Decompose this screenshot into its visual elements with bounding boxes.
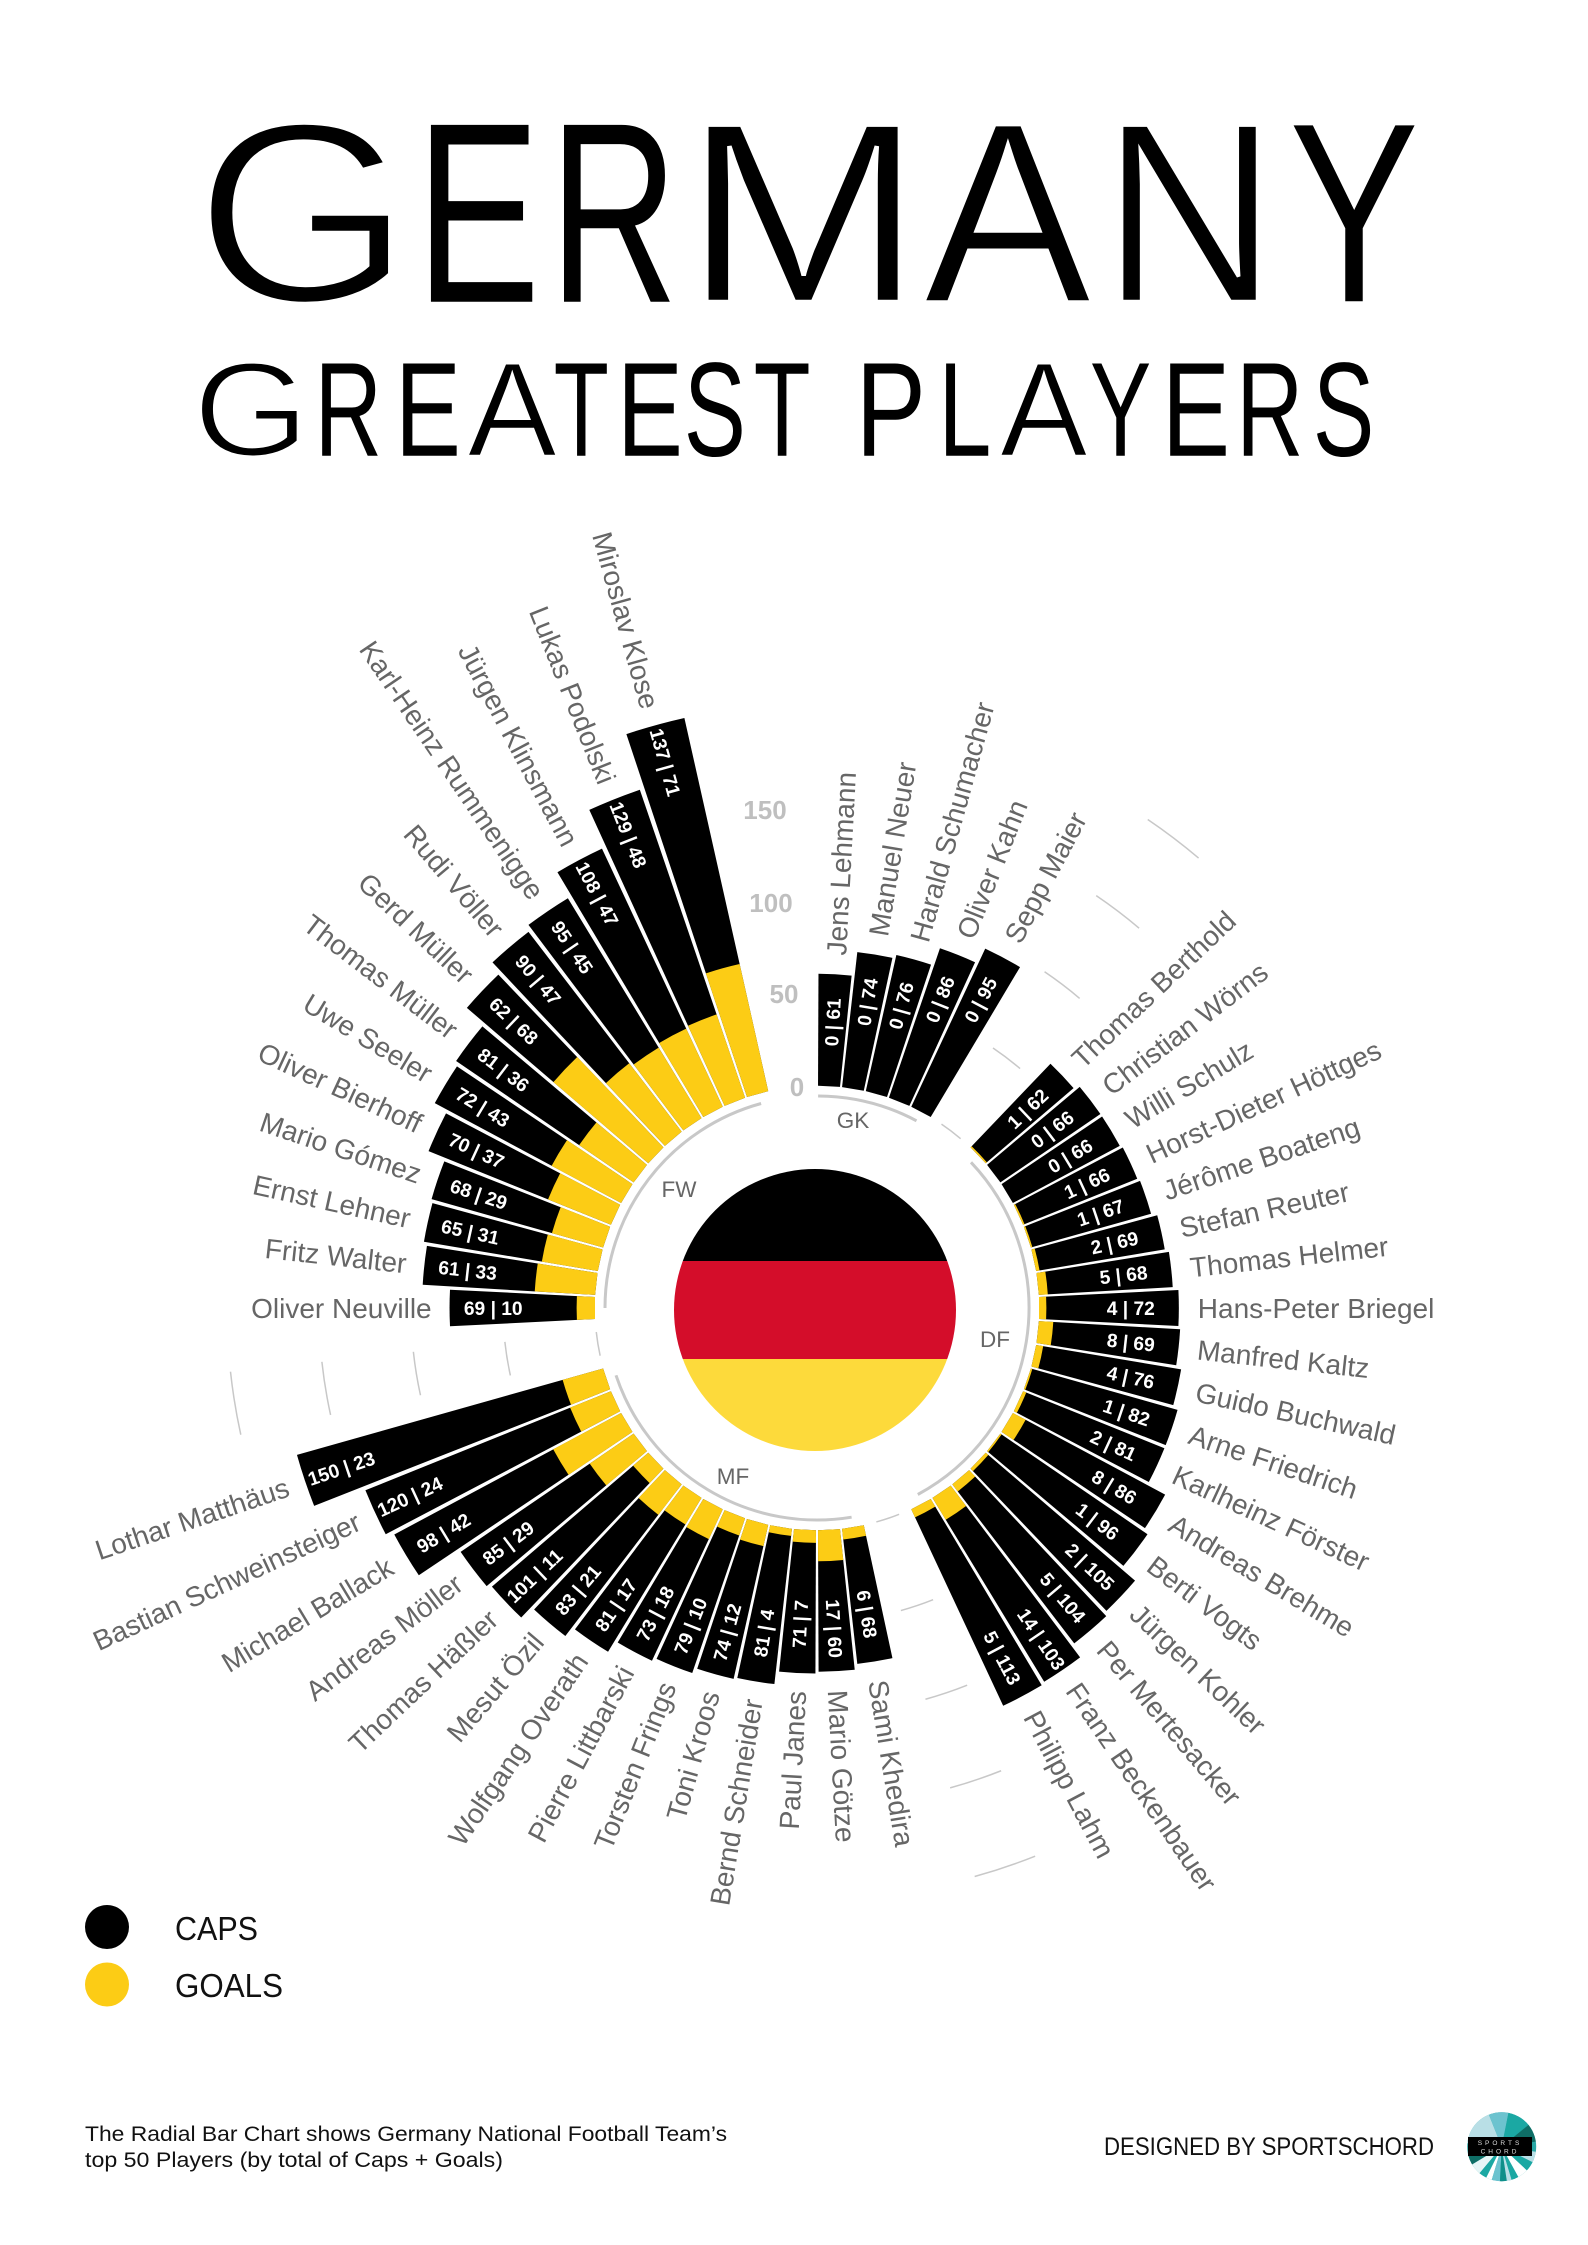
player: Harald Schumacher: 0 | 76 xyxy=(886,980,919,1032)
player: Lukas Podolski xyxy=(513,597,760,1112)
player: Horst-Dieter Höttges xyxy=(1011,1032,1386,1230)
player: Thomas Berthold xyxy=(967,904,1242,1168)
player: Bernd Schneider: Bernd Schneider xyxy=(704,1697,769,1908)
credit: DESIGNED BY SPORTSCHORD xyxy=(1104,2133,1434,2161)
player: Paul Janes xyxy=(771,1529,823,1830)
title: GERMANY: N xyxy=(1102,70,1278,357)
player: Hans-Peter Briegel: 4 | 72 xyxy=(1107,1299,1155,1320)
position labels: DF xyxy=(980,1327,1010,1352)
player: Fritz Walter xyxy=(263,1228,598,1303)
player: Toni Kroos: 74 | 12 xyxy=(710,1602,746,1664)
player: Manuel Neuer: 0 | 74 xyxy=(854,976,883,1028)
subtitle: GREATEST PLAYERS: T xyxy=(554,336,609,485)
player: Lukas Podolski: 129 | 48 xyxy=(604,799,650,872)
player: Guido Buchwald xyxy=(1030,1338,1399,1453)
player: Christian Wörns xyxy=(983,955,1274,1187)
player: Christian Wörns: 0 | 66 xyxy=(1028,1108,1079,1153)
player: Paul Janes: Paul Janes xyxy=(774,1690,812,1830)
player: Arne Friedrich xyxy=(1021,1361,1363,1507)
player: Toni Kroos: Toni Kroos xyxy=(661,1688,726,1823)
player: Jürgen Klinsmann: 108 | 47 xyxy=(571,859,622,930)
footnote xyxy=(85,2123,727,2172)
player: Per Mertesacker xyxy=(945,1464,1252,1815)
player: Jérôme Boateng: 1 | 67 xyxy=(1075,1196,1127,1232)
player: Sami Khedira xyxy=(835,1524,923,1849)
player: Thomas Häßler xyxy=(338,1445,670,1763)
player: Jürgen Kohler: Jürgen Kohler xyxy=(1124,1598,1272,1741)
group arc: MF xyxy=(616,1375,852,1520)
player: Stefan Reuter: Stefan Reuter xyxy=(1177,1176,1352,1244)
player: Jérôme Boateng xyxy=(1022,1109,1364,1254)
player: Thomas Helmer xyxy=(1036,1228,1390,1302)
player: Jens Lehmann xyxy=(812,771,863,1087)
player: Thomas Häßler: 101 | 11 xyxy=(503,1545,568,1608)
player: Sepp Maier xyxy=(904,805,1096,1121)
player: Oliver Bierhoff: Oliver Bierhoff xyxy=(253,1037,427,1139)
subtitle: GREATEST PLAYERS: R xyxy=(1236,336,1303,485)
player: Philipp Lahm: Philipp Lahm xyxy=(1017,1706,1121,1863)
subtitle: GREATEST PLAYERS: A xyxy=(1000,336,1088,485)
central flag of Germany xyxy=(670,1165,960,1455)
player: Gerd Müller: 62 | 68 xyxy=(484,994,542,1050)
player: Mario Gómez: Mario Gómez xyxy=(256,1107,425,1190)
player: Jürgen Kohler xyxy=(964,1446,1276,1744)
subtitle: GREATEST PLAYERS: A xyxy=(467,336,558,485)
player: Mario Götze: 17 | 60 xyxy=(821,1599,845,1659)
player: Bernd Schneider xyxy=(701,1524,800,1908)
player: Rudi Völler: 90 | 47 xyxy=(510,952,564,1010)
player: Horst-Dieter Höttges: Horst-Dieter Höttges xyxy=(1141,1034,1386,1170)
player: Lukas Podolski: Lukas Podolski xyxy=(523,602,622,788)
legend: goals label: GOALS xyxy=(175,1967,283,2004)
subtitle: GREATEST PLAYERS: E xyxy=(617,336,683,485)
position labels: MF xyxy=(717,1464,749,1489)
grid arcs: DF-MF gap xyxy=(857,1508,1035,1877)
player: Thomas Müller xyxy=(294,903,653,1191)
player: Thomas Müller: Thomas Müller xyxy=(297,908,464,1045)
player: Thomas Helmer: 5 | 68 xyxy=(1099,1263,1149,1289)
player: Sepp Maier: 0 | 95 xyxy=(961,974,1002,1027)
player: Uwe Seeler: 72 | 43 xyxy=(452,1084,513,1132)
player: Manuel Neuer: Manuel Neuer xyxy=(863,760,922,938)
title: GERMANY: M xyxy=(683,70,924,357)
player: Per Mertesacker: Per Mertesacker xyxy=(1091,1635,1247,1812)
player: Arne Friedrich: 1 | 82 xyxy=(1100,1396,1152,1431)
subtitle: GREATEST PLAYERS: E xyxy=(395,336,461,485)
player: Willi Schulz xyxy=(998,1033,1259,1208)
player: Miroslav Klose: 137 | 71 xyxy=(645,726,683,799)
player: Lothar Matthäus: 150 | 23 xyxy=(306,1449,378,1491)
player: Uwe Seeler: Uwe Seeler xyxy=(298,988,438,1089)
grid arcs: MF-FW gap xyxy=(230,1312,603,1435)
player: Per Mertesacker: 5 | 104 xyxy=(1035,1569,1089,1628)
player: Oliver Neuville xyxy=(251,1290,595,1326)
player: Oliver Kahn: 0 | 86 xyxy=(923,974,960,1026)
subtitle: GREATEST PLAYERS: Y xyxy=(1090,336,1151,485)
player: Torsten Frings: Torsten Frings xyxy=(588,1678,682,1854)
player: Andreas Möller xyxy=(296,1425,653,1711)
player: Rudi Völler: Rudi Völler xyxy=(398,819,510,943)
player: Bastian Schweinsteiger: Bastian Schweinsteiger xyxy=(88,1506,365,1657)
group arc: GK xyxy=(818,1096,916,1121)
player: Guido Buchwald: 4 | 76 xyxy=(1105,1363,1156,1394)
player: Oliver Kahn: Oliver Kahn xyxy=(951,796,1034,943)
player: Manfred Kaltz xyxy=(1036,1314,1371,1386)
player: Philipp Lahm xyxy=(902,1494,1127,1866)
player: Michael Ballack: Michael Ballack xyxy=(216,1551,400,1678)
player: Fritz Walter: Fritz Walter xyxy=(263,1233,408,1279)
subtitle: GREATEST PLAYERS: E xyxy=(1162,336,1230,485)
player: Bastian Schweinsteiger: 120 | 24 xyxy=(375,1474,447,1522)
player: Arne Friedrich: Arne Friedrich xyxy=(1185,1419,1362,1505)
player: Oliver Neuville: 69 | 10 xyxy=(464,1299,523,1320)
player: Mario Götze: Mario Götze xyxy=(822,1689,861,1843)
player: Jürgen Klinsmann: Jürgen Klinsmann xyxy=(452,639,584,851)
player: Torsten Frings xyxy=(584,1507,753,1855)
player: Torsten Frings: 79 | 10 xyxy=(671,1595,712,1658)
player: Thomas Berthold: Thomas Berthold xyxy=(1066,905,1242,1074)
player: Mario Gómez xyxy=(255,1102,613,1256)
player: Willi Schulz: Willi Schulz xyxy=(1120,1035,1258,1135)
player: Stefan Reuter: 2 | 69 xyxy=(1089,1229,1141,1259)
player: Hans-Peter Briegel xyxy=(1039,1290,1434,1326)
player: Sepp Maier: Sepp Maier xyxy=(999,807,1093,948)
group arc: DF xyxy=(918,1162,1029,1494)
player: Franz Beckenbauer: 14 | 103 xyxy=(1012,1605,1068,1675)
subtitle: GREATEST PLAYERS: S xyxy=(684,336,746,485)
player: Stefan Reuter xyxy=(1030,1174,1352,1277)
subtitle: GREATEST PLAYERS: G xyxy=(193,336,310,485)
player: Guido Buchwald: Guido Buchwald xyxy=(1193,1377,1398,1451)
player: Pierre Littbarski: 73 | 18 xyxy=(633,1583,680,1645)
player: Harald Schumacher xyxy=(859,698,1002,1099)
player: Manuel Neuer xyxy=(835,759,924,1092)
player: Andreas Möller: Andreas Möller xyxy=(300,1568,469,1707)
player: Sami Khedira: Sami Khedira xyxy=(862,1678,920,1849)
player: Ernst Lehner xyxy=(249,1165,604,1280)
title: GERMANY: A xyxy=(924,70,1093,357)
player: Berti Vogts: Berti Vogts xyxy=(1141,1550,1268,1657)
axis scale labels: 150 xyxy=(743,795,787,825)
player: Christian Wörns: Christian Wörns xyxy=(1096,956,1274,1101)
player: Gerd Müller: Gerd Müller xyxy=(352,867,479,990)
player: Karlheinz Förster: 2 | 81 xyxy=(1087,1427,1139,1466)
footnote: top 50 Players (by total of Caps + Goals) xyxy=(85,2149,503,2172)
axis scale labels: 0 xyxy=(790,1072,804,1102)
player: Fritz Walter: 61 | 33 xyxy=(437,1258,498,1285)
grid arcs: GK-DF gap xyxy=(926,819,1199,1151)
player: Michael Ballack: 98 | 42 xyxy=(414,1510,475,1558)
player: Berti Vogts: 1 | 96 xyxy=(1071,1500,1122,1545)
player: Wolfgang Overath: Wolfgang Overath xyxy=(442,1647,594,1851)
player: Sami Khedira: 6 | 68 xyxy=(851,1589,880,1640)
footnote: The Radial Bar Chart shows Germany National Football Team’s xyxy=(85,2123,727,2146)
player: Andreas Brehme: 8 | 86 xyxy=(1088,1467,1140,1510)
title: GERMANY: R xyxy=(549,70,678,357)
title: GERMANY: G xyxy=(195,70,412,357)
player: Harald Schumacher: Harald Schumacher xyxy=(904,699,1001,945)
player: Philipp Lahm: 5 | 113 xyxy=(978,1628,1024,1689)
player: Miroslav Klose: Miroslav Klose xyxy=(586,529,665,712)
player: Andreas Brehme xyxy=(997,1406,1362,1647)
legend xyxy=(85,1905,283,2006)
subtitle: GREATEST PLAYERS: R xyxy=(314,336,382,485)
player: Karl-Heinz Rummenigge xyxy=(347,630,712,1138)
player: Wolfgang Overath xyxy=(438,1481,709,1853)
player: Paul Janes: 71 | 7 xyxy=(790,1600,813,1649)
player: Jürgen Kohler: 2 | 105 xyxy=(1061,1540,1118,1596)
position labels xyxy=(662,1108,1010,1489)
subtitle: GREATEST PLAYERS: S xyxy=(1313,336,1374,485)
player: Ernst Lehner: 65 | 31 xyxy=(439,1217,501,1250)
player: Uwe Seeler xyxy=(295,982,638,1212)
player: Willi Schulz: 0 | 66 xyxy=(1045,1136,1097,1178)
position labels: FW xyxy=(662,1177,697,1202)
axis scale labels: 50 xyxy=(770,979,798,1009)
player: Bernd Schneider: 81 | 4 xyxy=(751,1608,779,1659)
legend: goals swatch xyxy=(85,1962,129,2006)
player: Mesut Özil xyxy=(437,1464,689,1751)
player: Mesut Özil: 83 | 21 xyxy=(552,1561,606,1620)
player: Ernst Lehner: Ernst Lehner xyxy=(250,1169,413,1234)
subtitle: GREATEST PLAYERS: T xyxy=(754,336,809,485)
player: Hans-Peter Briegel: Hans-Peter Briegel xyxy=(1198,1293,1434,1324)
player: Thomas Helmer: Thomas Helmer xyxy=(1188,1231,1390,1283)
player: Mario Gómez: 68 | 29 xyxy=(447,1176,510,1215)
icon: SportsChord logo: CHORD xyxy=(1481,2148,1519,2156)
player: Oliver Bierhoff: 70 | 37 xyxy=(445,1130,507,1174)
player: Karlheinz Förster xyxy=(1011,1384,1376,1580)
icon: SportsChord logo xyxy=(1467,2112,1536,2182)
player: Mario Götze xyxy=(811,1529,864,1843)
player: Michael Ballack xyxy=(212,1402,639,1685)
player: Oliver Kahn xyxy=(882,794,1036,1109)
player: Gerd Müller xyxy=(347,861,672,1172)
player: Oliver Bierhoff xyxy=(251,1031,624,1234)
title: GERMANY: Y xyxy=(1289,70,1420,357)
player: Jens Lehmann: 0 | 61 xyxy=(822,997,846,1047)
subtitle: GREATEST PLAYERS: L xyxy=(938,336,991,485)
player: Thomas Müller: 81 | 36 xyxy=(473,1045,532,1097)
player: Toni Kroos xyxy=(657,1517,776,1824)
player: Mesut Özil: Mesut Özil xyxy=(441,1627,550,1748)
group arc: FW xyxy=(605,1104,761,1308)
player: Karl-Heinz Rummenigge: 95 | 45 xyxy=(546,918,596,978)
player: Horst-Dieter Höttges: 1 | 66 xyxy=(1061,1165,1114,1204)
player: Franz Beckenbauer xyxy=(924,1480,1228,1900)
player: Rudi Völler xyxy=(392,813,691,1154)
player: Jens Lehmann: Jens Lehmann xyxy=(821,771,862,956)
player: Jürgen Klinsmann xyxy=(444,634,735,1124)
player: Lothar Matthäus xyxy=(88,1353,615,1576)
axis scale labels xyxy=(743,795,804,1102)
player: Berti Vogts xyxy=(982,1427,1271,1660)
player: Miroslav Klose xyxy=(573,525,787,1102)
player: Andreas Möller: 85 | 29 xyxy=(479,1518,539,1570)
player: Karl-Heinz Rummenigge: Karl-Heinz Rummenigge xyxy=(353,635,550,905)
player: Wolfgang Overath: 81 | 17 xyxy=(592,1576,642,1636)
player: Thomas Häßler: Thomas Häßler xyxy=(343,1604,504,1759)
position labels: GK xyxy=(837,1108,869,1133)
player: Manfred Kaltz: 8 | 69 xyxy=(1106,1331,1156,1357)
icon: SportsChord logo: SPORTS xyxy=(1478,2140,1522,2147)
player: Thomas Berthold: 1 | 62 xyxy=(1004,1086,1053,1134)
axis scale labels: 100 xyxy=(749,888,793,918)
player: Manfred Kaltz: Manfred Kaltz xyxy=(1196,1334,1371,1384)
player: Karlheinz Förster: Karlheinz Förster xyxy=(1168,1460,1374,1577)
player: Pierre Littbarski xyxy=(518,1495,730,1849)
title: GERMANY: E xyxy=(416,70,540,357)
legend: caps label: CAPS xyxy=(175,1910,258,1947)
subtitle: GREATEST PLAYERS: P xyxy=(856,336,926,485)
player: Pierre Littbarski: Pierre Littbarski xyxy=(522,1661,640,1847)
player: Bastian Schweinsteiger xyxy=(84,1379,626,1664)
radial bar chart xyxy=(84,525,1434,1908)
player: Oliver Neuville: Oliver Neuville xyxy=(251,1293,432,1324)
player: Lothar Matthäus: Lothar Matthäus xyxy=(91,1472,293,1566)
player: Jérôme Boateng: Jérôme Boateng xyxy=(1159,1111,1364,1206)
player: Franz Beckenbauer: Franz Beckenbauer xyxy=(1060,1677,1223,1897)
legend: caps swatch xyxy=(85,1905,129,1949)
player: Andreas Brehme: Andreas Brehme xyxy=(1164,1509,1360,1643)
